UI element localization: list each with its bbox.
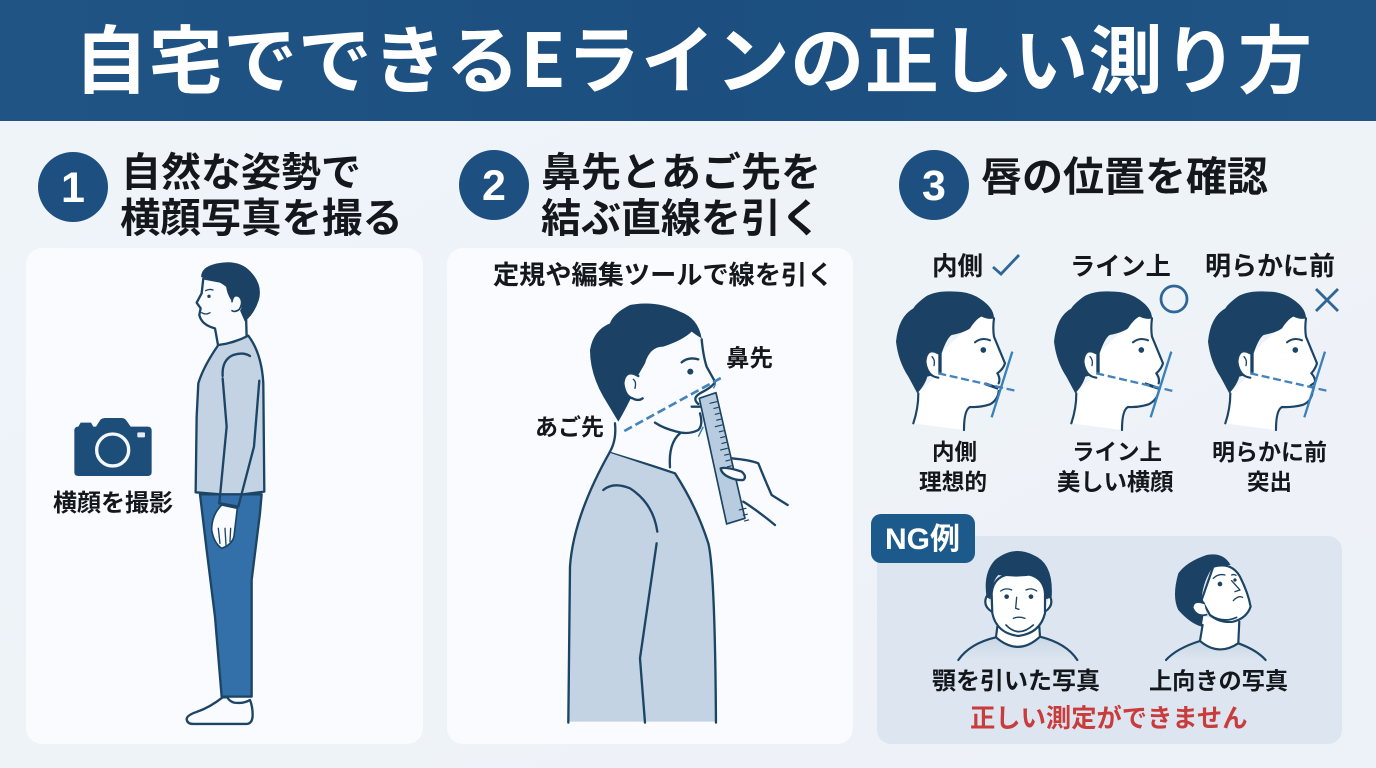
badge: NG example bbox=[871, 514, 975, 563]
icon: camera bbox=[74, 418, 152, 476]
step 1 heading: 横顔写真を撮る bbox=[120, 195, 403, 241]
step 1 heading: 自然な姿勢で bbox=[121, 151, 361, 195]
caption: chin tucked photo: 顎を引いた写真 bbox=[932, 668, 1100, 695]
step 3 heading: 唇の位置を確認 bbox=[981, 154, 1268, 200]
step 2 heading: 結ぶ直線を引く bbox=[541, 197, 821, 241]
title banner: 自宅でできるEラインの正しい測り方 bbox=[74, 2, 1312, 109]
column: on the line: 美しい横顔 bbox=[1057, 469, 1174, 495]
column: clearly in front bbox=[1205, 251, 1338, 495]
column: on the line bbox=[1054, 253, 1187, 495]
column: clearly in front: 突出 bbox=[1247, 470, 1292, 495]
step 2 heading: 2 bbox=[482, 162, 506, 210]
badge: NG example: NG例 bbox=[885, 523, 960, 556]
instruction text: 定規や編集ツールで線を引く bbox=[493, 260, 833, 290]
step 2 heading: 鼻先とあご先を bbox=[541, 151, 821, 195]
camera label: 横顔を撮影 bbox=[53, 490, 173, 517]
column: inside the line: 内側 bbox=[932, 253, 983, 281]
column: inside the line: 内側 bbox=[932, 440, 977, 465]
column: on the line: ライン上 bbox=[1072, 440, 1162, 465]
panel: step 2 drawing the line bbox=[447, 248, 853, 744]
step 1 heading bbox=[38, 151, 403, 241]
column: clearly in front: 明らかに前 bbox=[1212, 439, 1327, 465]
illustration: man in profile with ruler bbox=[568, 303, 788, 723]
column: inside the line: 理想的 bbox=[919, 469, 987, 495]
panel: step 1 standing profile bbox=[26, 248, 423, 744]
warning text: 正しい測定ができません bbox=[970, 704, 1248, 733]
column: inside the line bbox=[896, 253, 1019, 495]
panel: lip position comparison bbox=[896, 251, 1338, 495]
step 3 heading: 3 bbox=[922, 162, 946, 210]
step 2 heading bbox=[459, 150, 821, 241]
caption: upward photo: 上向きの写真 bbox=[1149, 668, 1288, 694]
column: on the line: ライン上 bbox=[1070, 253, 1171, 281]
column: clearly in front: 明らかに前 bbox=[1205, 251, 1335, 281]
illustration: chin tucked bbox=[958, 551, 1077, 660]
illustration: face tilted upward bbox=[1166, 554, 1266, 660]
panel: NG examples bbox=[871, 514, 1342, 744]
label: chin tip: あご先 bbox=[535, 414, 604, 440]
step 1 heading: 1 bbox=[61, 164, 85, 212]
illustration: standing man in profile bbox=[187, 263, 264, 724]
step 3 heading bbox=[899, 150, 1268, 220]
label: nose tip: 鼻先 bbox=[726, 345, 773, 371]
